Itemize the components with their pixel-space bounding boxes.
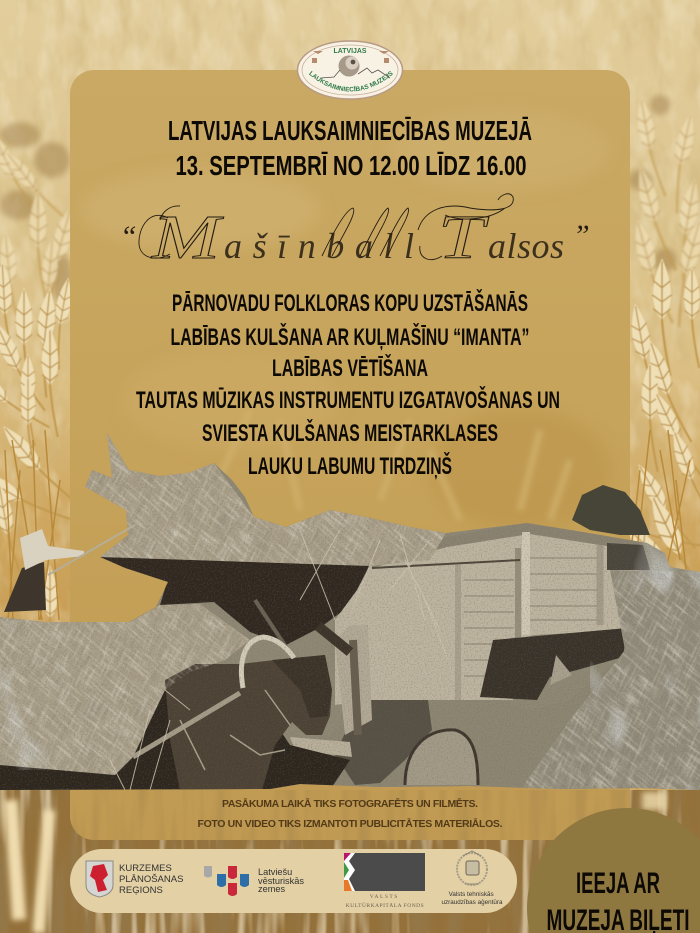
script title: ”: [573, 219, 590, 252]
wagon undercarriage shadow: [480, 628, 627, 700]
logo top label: LATVIJAS: [334, 46, 366, 55]
loose straw strands: [110, 530, 448, 790]
museum logo: LAUKSAIMNIECĪBAS MUZEJS: [309, 70, 393, 92]
script title: M: [151, 204, 224, 272]
logo: State Culture Capital Foundation: KULTŪRKAPITĀLA FONDS: [346, 902, 424, 909]
logo: State Culture Capital Foundation: [344, 853, 425, 909]
archive photo: threshing scene: [0, 433, 700, 790]
script title: ašīnball: [224, 226, 414, 266]
right overgrown hay: [577, 570, 688, 790]
programme list: LABĪBAS VĒTĪŠANA: [272, 354, 428, 382]
horse: [165, 655, 332, 790]
script title: T: [438, 204, 490, 272]
logo: State Technical Supervision Agency: uzraudzības aģentūra: [442, 898, 503, 906]
panel wheat texture: [70, 110, 630, 840]
programme list: LABĪBAS KULŠANA AR KUĻMAŠĪNU “IMANTA”: [170, 323, 530, 351]
script title: alsos: [488, 226, 564, 266]
event venue and date: 13. SEPTEMBRĪ NO 12.00 LĪDZ 16.00: [176, 150, 526, 181]
post in front of wagon: [335, 625, 372, 735]
translucent main panel: [70, 70, 630, 840]
figure: woman on hay with pitchfork: [4, 525, 135, 612]
lower-left area shadow: [0, 690, 350, 790]
logo: Latvian historic lands: [204, 866, 307, 896]
logo: Kurzeme planning region: KURZEMES: [119, 863, 172, 874]
faded film haze: [590, 540, 700, 790]
dark tree behind wagon: [572, 485, 650, 535]
programme list: [136, 289, 560, 480]
logo: Latvian historic lands: Latviešu: [258, 867, 292, 877]
logo: Kurzeme planning region: [86, 861, 186, 897]
admission badge: [527, 808, 700, 933]
logo: Latvian historic lands: zemes: [258, 884, 285, 894]
icon: millstone: [312, 51, 390, 78]
sponsor logos bar: [70, 849, 517, 913]
logo: Kurzeme planning region: PLĀNOŠANAS: [119, 874, 183, 885]
event venue and date: [168, 115, 532, 181]
upper hay mass: [85, 433, 446, 566]
logo: State Technical Supervision Agency: Valsts tehniskās: [449, 891, 494, 898]
logo: State Culture Capital Foundation: VALSTS: [370, 894, 399, 900]
lower-left hay: [0, 604, 250, 775]
logo: Latvian historic lands: vēsturiskās: [258, 876, 304, 886]
programme list: SVIESTA KULŠANAS MEISTARKLASES: [202, 419, 498, 447]
logo bottom label: [305, 71, 397, 92]
museum logo: [296, 40, 404, 100]
straw texture overlays: [0, 435, 700, 790]
wagon body: [335, 525, 643, 705]
programme list: LAUKU LABUMU TIRDZIŅŠ: [248, 452, 452, 480]
threshing machine shadow underside: [100, 557, 372, 645]
event venue and date: LATVIJAS LAUKSAIMNIECĪBAS MUZEJĀ: [168, 115, 532, 146]
ground and wheel: [280, 784, 692, 790]
photo and video notice: PASĀKUMA LAIKĀ TIKS FOTOGRAFĒTS UN FILMĒTS.: [222, 798, 478, 810]
logo: State Technical Supervision Agency: [442, 851, 503, 906]
photo and video notice: FOTO UN VIDEO TIKS IZMANTOTI PUBLICITĀTES MATERIĀLOS.: [198, 818, 503, 830]
script title: “: [120, 220, 137, 253]
script title: [120, 194, 590, 272]
photo and video notice: [198, 798, 503, 830]
logo: Kurzeme planning region: REĢIONS: [119, 885, 163, 896]
